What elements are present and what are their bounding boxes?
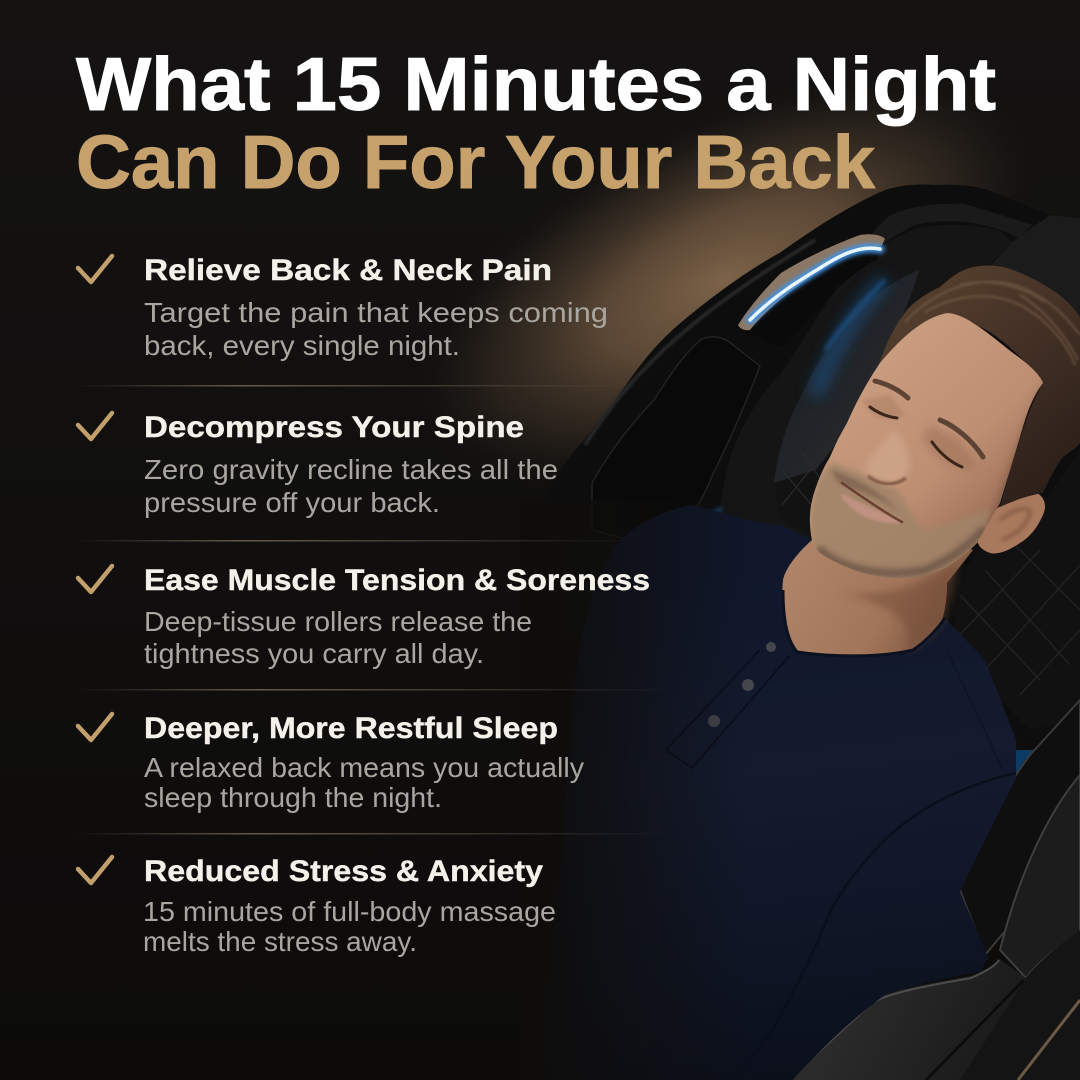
chair: headrest quilt	[950, 450, 1080, 730]
chair: quilting lines left	[782, 445, 830, 515]
benefit 4: sleep through the night.	[144, 782, 442, 813]
chair: inner pad	[719, 225, 1012, 540]
moustache	[832, 470, 894, 508]
benefit 4: A relaxed back means you actually	[144, 752, 584, 783]
placket	[666, 650, 790, 768]
benefit 4	[78, 712, 584, 813]
chair: side bolster	[592, 337, 760, 539]
chair: lower pad black	[960, 700, 1080, 955]
chair: bottom base	[780, 935, 1080, 1080]
nose under shadow	[868, 476, 906, 484]
ear	[977, 492, 1045, 553]
check icon	[78, 566, 112, 592]
warm glow behind chair	[330, 0, 1080, 560]
temple shade	[986, 384, 1042, 526]
massage chair	[530, 185, 1080, 1080]
benefit 1: back, every single night.	[144, 330, 460, 361]
left eye	[870, 407, 897, 418]
chair: dark wedge	[960, 930, 1080, 1080]
benefit 2: Decompress Your Spine	[144, 411, 524, 444]
benefit 1	[78, 254, 608, 361]
chair: right top pad	[988, 215, 1080, 330]
benefit 3: Ease Muscle Tension & Soreness	[144, 564, 650, 597]
right eye	[932, 442, 962, 467]
chair: base edge highlight	[790, 960, 999, 1078]
benefit 3	[78, 564, 650, 669]
mouth line	[842, 483, 902, 522]
left eyebrow	[875, 381, 908, 398]
chair: quilting lines right	[955, 545, 1080, 695]
chair: gold glint	[1018, 1000, 1080, 1080]
chair: lower blue patch	[1012, 750, 1042, 774]
title line 2: Can Do For Your Back	[76, 120, 875, 204]
lower lip	[843, 496, 898, 521]
chair: upper panel	[860, 204, 1033, 262]
chair: light strip trim	[738, 234, 885, 330]
right eyebrow	[940, 420, 983, 457]
collar	[783, 590, 945, 656]
title line 1: What 15 Minutes a Night	[76, 42, 996, 126]
chair: light strip housing	[738, 235, 885, 346]
chair: cushion	[774, 270, 919, 483]
benefit 5: Reduced Stress & Anxiety	[144, 855, 543, 888]
hair strands	[905, 282, 1080, 365]
chair: lower pad strip	[1000, 775, 1080, 978]
jaw stubble dark	[818, 528, 985, 573]
benefit 2: pressure off your back.	[144, 487, 440, 518]
benefit 1: Relieve Back & Neck Pain	[144, 254, 552, 287]
shirt buttons	[708, 642, 776, 727]
benefit list	[75, 254, 675, 957]
chair: outer shell	[530, 185, 1080, 780]
benefit 3: tightness you carry all day.	[144, 638, 484, 669]
check icon	[78, 413, 112, 439]
check icon	[78, 256, 112, 282]
title	[76, 42, 996, 204]
neck	[782, 520, 973, 655]
man	[540, 266, 1080, 1080]
sleeve seam	[735, 773, 1016, 1080]
face	[810, 313, 1043, 578]
eye socket shadow left	[864, 396, 903, 420]
benefit 1: Target the pain that keeps coming	[144, 297, 608, 328]
eye socket shadow right	[922, 426, 974, 468]
chair: white strip core	[750, 248, 880, 320]
stubble	[810, 462, 990, 586]
neck shadow	[830, 560, 960, 650]
ear inner	[1000, 509, 1030, 540]
benefit 2	[78, 411, 558, 518]
chair: blue strip glow	[750, 248, 880, 320]
hair	[877, 266, 1080, 507]
benefit 5	[78, 855, 556, 957]
chair: blue edge	[825, 280, 885, 350]
benefit 2: Zero gravity recline takes all the	[144, 454, 558, 485]
face shading	[810, 384, 1042, 578]
benefit 5: melts the stress away.	[143, 926, 417, 957]
shoulder seam	[947, 650, 1002, 768]
chair: shell rim highlight	[585, 240, 815, 445]
chair: quilted lower cushion	[774, 421, 854, 535]
benefit 5: 15 minutes of full-body massage	[143, 896, 556, 927]
chair: base seam	[926, 980, 1024, 1080]
nose highlight	[866, 434, 909, 482]
check icon	[78, 714, 112, 740]
shirt	[540, 505, 1016, 1080]
left fade overlay	[520, 500, 760, 1080]
chair: blue slit	[698, 505, 722, 530]
benefit 3: Deep-tissue rollers release the	[144, 606, 532, 637]
chair: blue ambient	[815, 280, 885, 395]
check icon	[78, 857, 112, 883]
benefit 4: Deeper, More Restful Sleep	[144, 712, 558, 745]
